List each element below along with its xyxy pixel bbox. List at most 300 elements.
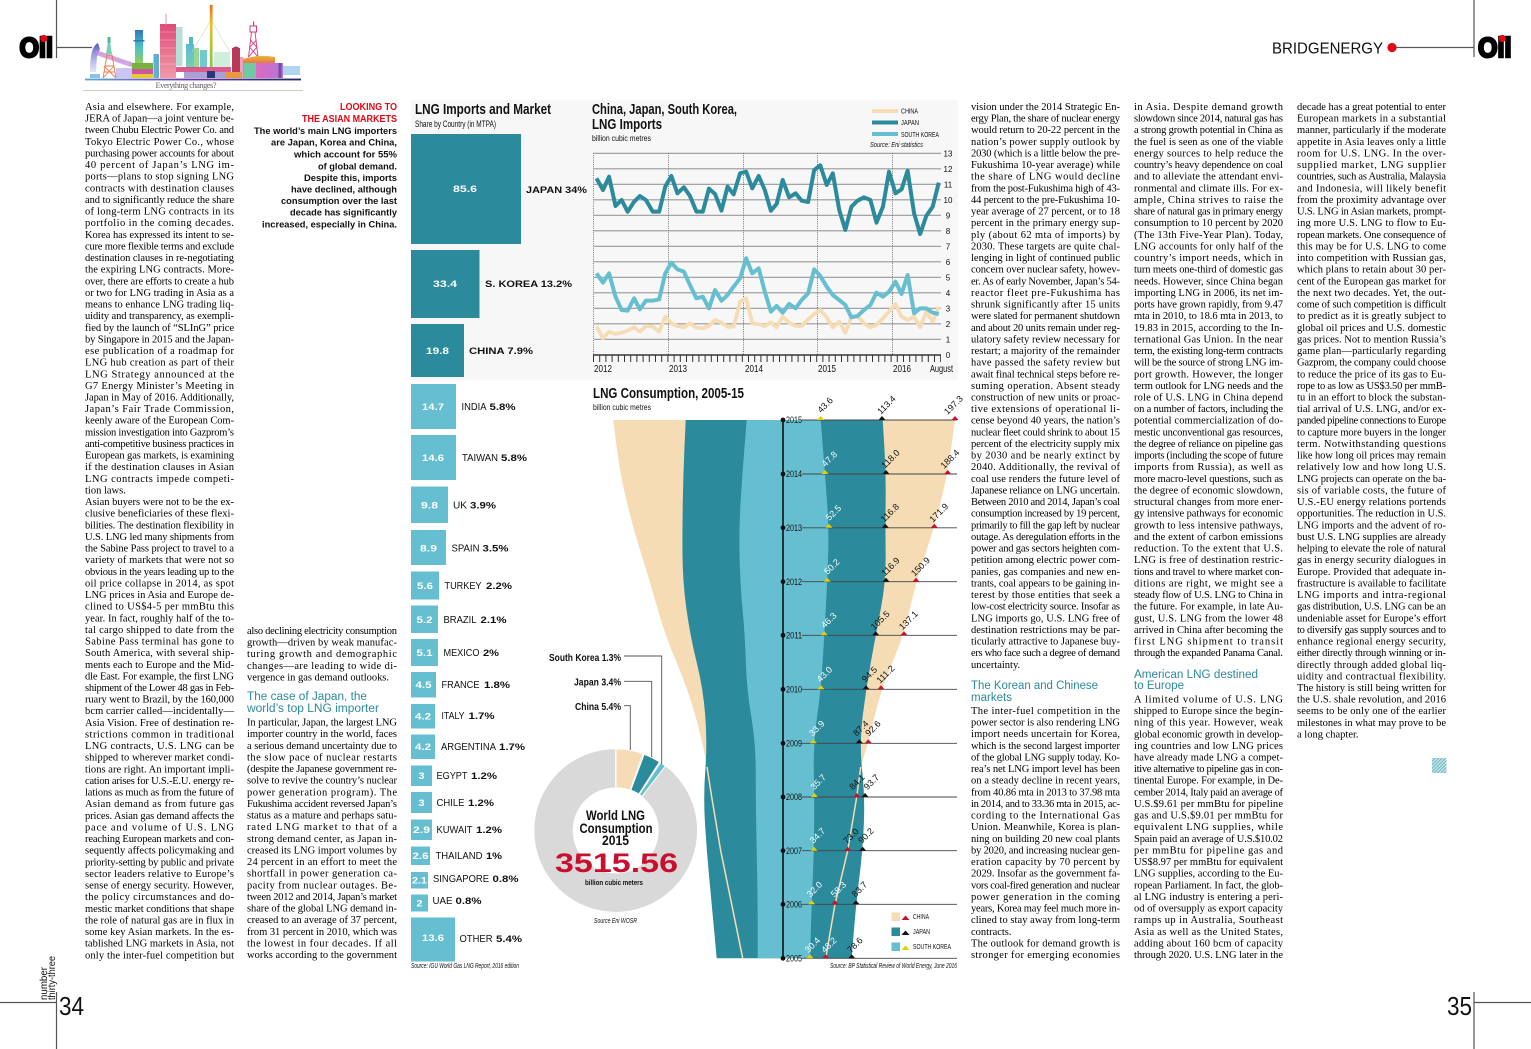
- column 3 body text, bottom: in 2014, and to 33.36 mta in 2015, ac-: [971, 799, 1120, 810]
- bar: India: 5.8%: [490, 402, 516, 413]
- bar: France: 4.5: [416, 680, 432, 691]
- bar: Other: 5.4%: [496, 934, 523, 945]
- column 4 body text, top: first LNG shipment to transit: [1134, 637, 1283, 648]
- column 4 body text, top: consumption to 10 percent by 2020: [1134, 218, 1283, 229]
- column 1 body text: ruary went to Brazil, by the 160,000: [85, 695, 234, 706]
- column 1 body text: tions are right. An important impli-: [85, 764, 234, 775]
- column 4 body text, top: imports from Russia), as well as: [1134, 462, 1283, 473]
- markers 2010: 43.0: [815, 665, 834, 684]
- right folio: page 35: [1447, 991, 1531, 1049]
- callout: looking to the Asian markets: The world’s main LNG importers: [254, 126, 397, 137]
- column 5 body text: LNG projects can operate on the ba-: [1297, 474, 1446, 485]
- column 5 body text: which plans to retain about 30 per-: [1297, 265, 1446, 276]
- subheading: American LNG destined to Europe: American LNG destined: [1134, 669, 1258, 681]
- year axis labels: 2015: [786, 415, 802, 425]
- column 4 body text, top: LNG is free of destination restric-: [1134, 555, 1284, 566]
- bar: UK: UK: [453, 500, 467, 512]
- year axis labels: [781, 415, 802, 964]
- bar: Singapore: 0.8%: [492, 874, 519, 885]
- column 1 body text: and to significantly reduce the share: [85, 195, 234, 206]
- y axis labels: 10: [944, 196, 953, 205]
- column 1 body text: South America, with several ship-: [85, 648, 234, 659]
- column 1 body text: LNG prices in Asia and Europe de-: [85, 590, 234, 601]
- series: China: [597, 298, 939, 338]
- column 3 body text, bottom: from 40.86 mta in 2013 to 37.98 mta: [971, 787, 1120, 798]
- left page masthead logo: Oil: [20, 32, 53, 63]
- column 5 body text: global oil prices and U.S. domestic: [1297, 323, 1446, 334]
- column 4 body text, bottom: ing countries and low LNG prices: [1134, 741, 1283, 752]
- year axis labels: 2010: [786, 684, 802, 694]
- column 3 body text, top: percent in the primary energy sup-: [971, 218, 1120, 229]
- column 1 body text: shipment of the Lower 48 gas in Feb-: [85, 683, 234, 694]
- column 3 body text, bottom: vors coal-fired generation and nuclear: [971, 880, 1120, 891]
- y axis labels: 6: [946, 258, 951, 267]
- column 4 body text, bottom: ramps up in Australia, Southeast: [1134, 915, 1283, 926]
- markers 2012: 116.9: [879, 555, 902, 578]
- donut chart: world LNG consumption: billion cubic meters: [585, 878, 643, 887]
- column 1 body text: clined to US$4-5 per mmBtu this: [85, 602, 234, 613]
- markers 2009: [807, 719, 883, 743]
- column 3 body text, top: from the post-Fukushima high of 43-: [971, 183, 1120, 194]
- column 1 body text: dle East. For example, the first LNG: [85, 671, 234, 682]
- column 3 body text, bottom: The inter-fuel competition in the: [971, 706, 1120, 717]
- column 3 body text, top: consumption increased by 19 percent,: [971, 509, 1120, 520]
- column 4 body text, bottom: ning of this year. However, weak: [1134, 718, 1284, 729]
- column 5 body text: decade has a great potential to enter: [1297, 102, 1446, 113]
- subheading: the Korean and Chinese markets: [971, 680, 1098, 704]
- bar: Singapore: 2.1: [412, 876, 428, 886]
- column 2 body text, bottom: solve to revive the country’s nuclear: [247, 776, 398, 787]
- column 4 body text, top: ronmental and climate ills. For ex-: [1134, 183, 1284, 194]
- leader labels: [549, 653, 621, 713]
- column 3 body text, top: nation’s power supply outlook by: [971, 137, 1121, 148]
- column 4 body text, bottom: Spain paid an average of U.S.$10.02: [1134, 834, 1283, 845]
- column 5 body text: frastructure is available to facilitate: [1297, 578, 1446, 589]
- column 4 body text, top: country’s heavy dependence on coal: [1134, 160, 1283, 171]
- column 5 body text: LNG imports and the advent of ro-: [1297, 520, 1446, 531]
- column 3 body text, top: coal use renders the future level of: [971, 474, 1120, 485]
- bar: Italy: ITALY: [442, 711, 465, 722]
- column 3 body text, bottom: which is the second largest importer: [971, 741, 1120, 752]
- column 3 body text, bottom: Union. Meanwhile, Korea is plan-: [971, 822, 1120, 833]
- y axis labels: 13: [944, 149, 953, 158]
- line chart legend: JAPAN: [901, 118, 919, 127]
- column 4 body text, top: (The 13th Five-Year Plan). Today,: [1134, 230, 1283, 241]
- column 2 body text, top: growth—driven by weak manufac-: [247, 638, 398, 649]
- column 1 body text: sequently affects policymaking and: [85, 846, 235, 857]
- column 1 body text: clusive beneficiaries of these flexi-: [85, 509, 234, 520]
- markers 2007: 90.2: [856, 826, 876, 845]
- column 5 body text: gas distribution, U.S. LNG can be an: [1297, 602, 1447, 613]
- column 5 body text: ing more U.S. LNG to flow to Eu-: [1297, 218, 1446, 229]
- markers 2014: [820, 447, 962, 474]
- column 1 body text: uidity and transparency, as exempli-: [85, 311, 234, 322]
- column 5 body text: either directly through winning or in-: [1297, 648, 1446, 659]
- line chart legend: [870, 106, 939, 149]
- heading: LNG consumption: billion cubic metres: [593, 402, 651, 412]
- column 1 body text: prices. Asian gas demand affects the: [85, 811, 234, 822]
- bar: Kuwait: 1.2%: [476, 825, 503, 836]
- bar: Taiwan: 14.6: [422, 453, 444, 464]
- column 4 body text, top: gy intensive pathways for economic: [1134, 509, 1283, 520]
- callout: looking to the Asian markets: [254, 102, 398, 230]
- column 4 body text, top: needs. However, since China began: [1134, 276, 1284, 287]
- callout: looking to the Asian markets: are Japan, Korea and China,: [271, 138, 397, 148]
- bar: UAE: 2: [416, 898, 422, 910]
- stream chart legend: JAPAN: [913, 927, 930, 936]
- markers 2014: 47.8: [820, 449, 839, 469]
- column 4 body text, bottom: tinental Europe. For example, in De-: [1134, 776, 1284, 787]
- column 1 body text: strictions common in traditional: [85, 729, 234, 740]
- column 3 body text, top: construction of new units or proac-: [971, 392, 1120, 403]
- bar: Other: 13.6: [422, 933, 444, 944]
- column 3 body text, top: Japanese reliance on LNG uncertain.: [971, 485, 1120, 496]
- column 1 body text: mestic market conditions that shape: [85, 904, 234, 915]
- column 5 body text: and Indonesia, will likely benefit: [1297, 183, 1446, 194]
- leader lines: [624, 656, 662, 764]
- column 4 body text, top: tions and travel to where market con-: [1134, 567, 1284, 578]
- bar: Mexico: MEXICO: [444, 648, 480, 659]
- bar: South Korea: 33.4: [433, 279, 458, 290]
- column 1 body text: European gas markets, is examining: [85, 451, 235, 462]
- column 2 body text, bottom: power generation program). The: [247, 787, 397, 798]
- column 1 body text: Asia Vision. Free of destination re-: [85, 718, 234, 729]
- slice: Japan: [631, 754, 660, 794]
- column 1 body text: contracts with destination clauses: [85, 183, 234, 194]
- bar: Chile: 1.2%: [468, 798, 495, 809]
- column 3 body text, top: ticularly attractive to Japanese buy-: [971, 637, 1120, 648]
- callout: looking to the Asian markets: which account for 55%: [293, 150, 398, 160]
- markers 2010: [815, 663, 897, 689]
- markers 2006: 83.7: [850, 880, 869, 899]
- year axis labels: 2013: [786, 523, 802, 533]
- column 3 body text, bottom: eration capacity by 70 percent by: [971, 857, 1121, 868]
- column 5 body text: Europe. Provided that adequate in-: [1297, 567, 1446, 578]
- markers 2008: [809, 772, 881, 797]
- column 3 body text, top: shrunk significantly after 15 units: [971, 300, 1120, 311]
- bar: Thailand: [411, 846, 503, 865]
- bar: Turkey: TURKEY: [444, 581, 482, 592]
- donut centre text: Consumption: [580, 820, 652, 836]
- y axis labels: 0: [946, 351, 951, 360]
- markers 2011: 46.3: [819, 611, 839, 630]
- column 4 body text, top: potential commercialization of do-: [1134, 416, 1284, 427]
- column 5 body text: into competition with Russian gas,: [1297, 253, 1446, 264]
- column 1 body text: some key Asian markets. In the es-: [85, 927, 234, 938]
- column 5 body text: Gazprom, the company could choose: [1297, 358, 1446, 369]
- column 4 body text, top: structural changes from more ener-: [1134, 497, 1284, 508]
- column 3 body text, top: power and gas sectors heighten com-: [971, 544, 1120, 555]
- column 4 body text, bottom: LNG supplies, according to the Eu-: [1134, 869, 1284, 880]
- column 1 body text: Japan’s Fair Trade Commission,: [85, 404, 234, 415]
- heading: China, Japan, South Korea imports: China, Japan, South Korea,: [592, 102, 737, 118]
- column 3 body text, top: cense beyond 40 years, the nation’s: [971, 416, 1120, 427]
- column 5 body text: the next two decades. Yet, the out-: [1297, 288, 1446, 299]
- subheading: American LNG destined to Europe: to Europe: [1134, 680, 1184, 692]
- bar: Taiwan: [411, 435, 528, 480]
- column 3 body text, top: suming operation. Absent steady: [971, 381, 1121, 392]
- column 4 body text, bottom: equivalent LNG supplies, while: [1134, 822, 1283, 833]
- column 1 body text: shipped to wherever market condi-: [85, 753, 234, 764]
- column 1 body text: Japan in May of 2016. Additionally,: [85, 392, 234, 403]
- column 1 body text: sector leaders relative to Europe’s: [85, 869, 234, 880]
- heading: LNG imports and market: [415, 102, 551, 129]
- column 2 body text, bottom: rated LNG market to that of a: [247, 822, 397, 833]
- bar: China: [411, 324, 534, 377]
- column 3 body text, top: vision under the 2014 Strategic En-: [971, 102, 1120, 113]
- bar: Spain: 3.5%: [482, 544, 509, 554]
- column 1 body text: tween Chubu Electric Power Co. and: [85, 125, 235, 136]
- column 5 body text: to reduce the price of its gas to Eu-: [1297, 369, 1446, 380]
- column 1 body text: only the inter-fuel competition but: [85, 950, 234, 961]
- bar: Egypt: 3: [418, 771, 424, 782]
- bar: Brazil: 2.1%: [480, 615, 507, 626]
- column 2 body text, bottom: status as a mature and perhaps satu-: [247, 811, 398, 822]
- column 4 body text, top: on a number of factors, including the: [1134, 404, 1283, 415]
- column 1 body text: portfolio in the coming decades.: [85, 218, 234, 229]
- markers 2009: 33.9: [807, 719, 827, 738]
- markers 2011: 137.1: [897, 609, 920, 632]
- column 3 body text, top: await final technical steps before re-: [971, 369, 1120, 380]
- column 4 body text, top: turn meets one-third of domestic gas: [1134, 265, 1283, 276]
- bar: Kuwait: 2.9: [413, 825, 430, 836]
- column 4 body text, bottom: have already made LNG a compet-: [1134, 752, 1284, 764]
- right page section name and logo: Oil: [1478, 32, 1512, 63]
- column 4 body text, top: steady flow of U.S. LNG to China in: [1134, 590, 1284, 601]
- donut chart: world LNG consumption: 3515.56: [555, 848, 678, 878]
- bar: Italy: 1.7%: [468, 711, 495, 722]
- markers 2014: 188.4: [938, 447, 962, 471]
- subheading: the Korean and Chinese markets: markets: [971, 692, 1012, 704]
- callout: looking to the Asian markets: Despite this, imports: [304, 173, 397, 184]
- left page masthead logo: [20, 0, 92, 63]
- column 4 body text, bottom: shipped to Europe since the begin-: [1134, 706, 1284, 717]
- column 3 body text, bottom: of the global LNG supply today. Ko-: [971, 752, 1120, 763]
- column 3 body text, top: were slated for permanent shutdown: [971, 311, 1121, 322]
- column 1 body text: the policy circumstances and do-: [85, 892, 234, 903]
- column 3 body text, top: have passed the safety review but: [971, 358, 1120, 369]
- bar: Spain: 8.9: [420, 544, 437, 554]
- column 2 body text, bottom: a serious demand uncertainty due to: [247, 741, 397, 752]
- column 3 body text, top: reactor fleet pre-Fukushima has: [971, 288, 1120, 299]
- column 5 body text: rope to as low as US$3.50 per mmB-: [1297, 381, 1446, 392]
- markers 2014: 118.0: [879, 448, 902, 470]
- column 4 body text, top: term outlook for LNG needs and the: [1134, 381, 1283, 392]
- column 2 body text, bottom: (despite the Japanese government re-: [247, 764, 398, 775]
- column 1 body text: of long-term LNG contracts in its: [85, 207, 234, 218]
- column 4 body text, top: a strong growth potential in China as: [1134, 125, 1283, 136]
- column 1 body text: ese publication of a roadmap for: [85, 346, 234, 357]
- column 4 body text, top: ternational Gas Union. In the near: [1134, 334, 1284, 345]
- column 2 body text, bottom: importer country in the world, faces: [247, 729, 397, 740]
- leader labels: South Korea 1.3%: [549, 653, 621, 664]
- column 3 body text, top: ers who face such a degree of demand: [971, 648, 1121, 659]
- bar: UK: [411, 486, 497, 523]
- bar: Singapore: SINGAPORE: [433, 874, 489, 885]
- column 5 body text: game plan—particularly regarding: [1297, 346, 1447, 357]
- markers 2010: 111.2: [874, 663, 897, 685]
- column 5 body text: European markets in a substantial: [1297, 114, 1446, 125]
- column 1 body text: variety of markets that were not so: [85, 555, 234, 566]
- column 5 body text: like how long oil prices may remain: [1297, 451, 1447, 462]
- column 5 body text: sis of variable costs, the future of: [1297, 485, 1446, 496]
- column 4 body text, top: port growth. However, the longer: [1134, 369, 1284, 380]
- column 5 body text: room for U.S. LNG. In the over-: [1297, 148, 1446, 159]
- column 1 body text: cation arises for U.S.-E.U. energy re-: [85, 776, 234, 787]
- markers 2008: 93.7: [862, 772, 881, 792]
- y axis labels: 12: [944, 165, 953, 174]
- markers 2009: 92.6: [863, 719, 883, 738]
- column 3 body text, top: tive extensions of operational li-: [971, 404, 1120, 415]
- line chart legend: CHINA: [901, 106, 918, 116]
- column 5 body text: a long chapter.: [1297, 729, 1359, 740]
- column 1 body text: or two for LNG trading in Asia as a: [85, 288, 234, 299]
- bar: China: 19.8: [426, 346, 449, 357]
- thin China line within Japan band: [707, 767, 861, 958]
- column 1 body text: means to enhance LNG trading liq-: [85, 300, 234, 311]
- y axis labels: [944, 149, 953, 360]
- column 5 body text: term. Notwithstanding questions: [1297, 439, 1446, 450]
- column 2 body text, bottom: the slow pace of nuclear restarts: [247, 752, 397, 763]
- bar: Egypt: 1.2%: [471, 771, 498, 782]
- column 3 body text, top: would return to 20-22 percent in the: [971, 125, 1120, 136]
- column 5 body text: relatively low and how long U.S.: [1297, 462, 1446, 473]
- column 3 body text, top: percent of the electricity supply mix: [971, 439, 1121, 450]
- line chart legend: Source: Eni statistics: [870, 142, 923, 149]
- right page section name and logo: [1272, 0, 1512, 63]
- column 2 body text, bottom: Fukushima accident reversed Japan’s: [247, 799, 397, 810]
- series: South Korea: [597, 258, 939, 317]
- column 1 body text: LNG contracts, U.S. LNG can be: [85, 741, 234, 752]
- column 2 body text, bottom: In particular, Japan, the largest LNG: [247, 718, 397, 729]
- stream chart legend: CHINA: [913, 912, 929, 921]
- x axis labels: 2012: [594, 363, 612, 375]
- year axis labels: 2012: [786, 577, 802, 587]
- markers 2012: 50.2: [822, 557, 842, 576]
- column 4 body text, top: ports have grown rapidly, from 9.47: [1134, 300, 1283, 311]
- bar: Japan: 85.6: [453, 184, 477, 195]
- bar: France: [411, 672, 511, 698]
- column 1 body text: destination clauses in re-negotiating: [85, 253, 235, 264]
- column 3 body text, top: ulatory safety review necessary for: [971, 334, 1120, 345]
- bar: Taiwan: 5.8%: [501, 453, 528, 464]
- column 4 body text, top: ditions are right, we might see a: [1134, 578, 1283, 589]
- bar: Argentina: ARGENTINA: [441, 742, 496, 753]
- subheading: the case of Japan: [246, 691, 379, 715]
- bar: Turkey: [411, 572, 513, 600]
- column 4 body text, top: ample, China strives to raise the: [1134, 195, 1283, 206]
- column 1 body text: by Singapore in 2015 and the Japan-: [85, 334, 234, 345]
- markers 2012: 150.9: [909, 555, 932, 578]
- column 5 body text: LNG imports and intra-regional: [1297, 590, 1446, 601]
- column 2 body text, bottom: 24 percent in an effort to meet the: [247, 857, 397, 868]
- column 5 body text: tu in an effort to block the substan-: [1297, 392, 1446, 403]
- column 1 body text: ports—plans to stop signing LNG: [85, 172, 234, 183]
- column 5 body text: seems to be only one of the earlier: [1297, 706, 1446, 717]
- column 4 body text, bottom: Asia as well as the United States,: [1134, 927, 1283, 938]
- column 1 body text: tion laws.: [85, 485, 126, 496]
- bar: Chile: CHILE: [436, 798, 465, 809]
- column 4 body text, top: share of natural gas in primary energy: [1134, 207, 1284, 218]
- column 4 body text, bottom: gas and U.S.$9.01 per mmBtu for: [1134, 811, 1284, 822]
- markers 2007: [808, 826, 876, 851]
- leader labels: China 5.4%: [575, 702, 621, 713]
- column 3 body text, top: lenging in light of continued public: [971, 253, 1120, 264]
- bar: Taiwan: TAIWAN: [462, 453, 498, 464]
- markers 2010: 94.5: [860, 665, 879, 684]
- bar: Mexico: 5.1: [416, 648, 433, 659]
- column 1 body text: if the destination clauses in Asian: [85, 462, 235, 473]
- column 1 body text: JERA of Japan—a joint venture be-: [85, 114, 234, 125]
- column 4 body text, bottom: U.S.$9.61 per mmBtu for pipeline: [1134, 799, 1283, 810]
- bar: Brazil: 5.2: [416, 615, 432, 626]
- bar: Argentina: 4.2: [415, 742, 431, 753]
- markers 2015: 197.3: [942, 393, 965, 417]
- subheading: the Korean and Chinese markets: The Korean and Chinese: [971, 680, 1098, 692]
- markers 2015: 113.4: [875, 394, 898, 416]
- column 1 body text: LNG contracts impede competi-: [85, 474, 234, 485]
- column 3 body text, top: destination restrictions may be par-: [971, 625, 1120, 636]
- year axis labels: 2009: [786, 738, 802, 748]
- column 3 body text, bottom: 2029. Insofar as the government fa-: [971, 869, 1120, 880]
- column 3 body text, bottom: clined to stay away from long-term: [971, 915, 1120, 926]
- column 5 body text: bust U.S. LNG supplies are already: [1297, 532, 1447, 543]
- markers 2005: 48.2: [819, 935, 839, 955]
- column 1 body text: ments each to Europe and the Mid-: [85, 660, 234, 671]
- column 1 body text: keenly aware of the European Com-: [85, 416, 234, 427]
- column 5 body text: U.S. LNG in Asian markets, prompt-: [1297, 207, 1446, 218]
- callout: looking to the Asian markets: LOOKING TO: [340, 102, 397, 113]
- bar: Other: OTHER: [460, 934, 492, 945]
- column 4 body text, top: imports (including the scope of future: [1134, 451, 1283, 462]
- column 4 body text, top: mta in 2010, to 18.6 mta in 2013, to: [1134, 311, 1283, 322]
- year axis labels: 2008: [786, 792, 802, 802]
- bar: France: FRANCE: [442, 680, 480, 691]
- markers 2005: [803, 935, 865, 958]
- source: stream chart: Source: BP Statistical Review of World Energy, June 2016: [830, 963, 957, 970]
- column 1 body text: tablished LNG markets in Asia, not: [85, 939, 234, 950]
- bar: Mexico: [411, 639, 500, 666]
- column 1 body text: U.S. LNG led many shipments from: [85, 532, 234, 543]
- column 1 body text: oil price collapse in 2014, as spot: [85, 578, 234, 589]
- right page section name and logo: BRIDGENERGY: [1272, 40, 1383, 58]
- y axis labels: 9: [946, 211, 951, 220]
- column 5 body text: gas prices. Not to mention Russia’s: [1297, 334, 1446, 345]
- bar: UAE: UAE: [432, 896, 453, 907]
- column 2 body text, bottom: tween 2012 and 2014, Japan’s market: [247, 892, 397, 903]
- bar: Thailand: THAILAND: [436, 851, 482, 862]
- column 4 body text, bottom: global economic growth in develop-: [1134, 729, 1284, 740]
- subheading: American LNG destined to Europe: [1134, 669, 1258, 692]
- column 4 body text, top: the degree of economic slowdown,: [1134, 485, 1283, 496]
- column 4 body text, top: the fuel is seen as one of the viable: [1134, 137, 1283, 148]
- donut chart: world LNG consumption: [549, 653, 678, 893]
- bar: Brazil: [411, 606, 507, 633]
- markers 2008: 35.7: [809, 772, 828, 792]
- column 5 body text: milestones in what may prove to be: [1297, 718, 1446, 729]
- year axis labels: 2006: [786, 900, 802, 910]
- leader labels: Japan 3.4%: [574, 678, 621, 688]
- column 1 body text: cure more flexible terms and exclude: [85, 241, 234, 252]
- left folio: number thirty-three, page 34: number: [38, 967, 50, 1000]
- bar: Chile: 3: [418, 798, 424, 809]
- column 3 body text, top: ergy Plan, the share of nuclear energy: [971, 114, 1121, 125]
- column 4 body text, top: will be the source of strong LNG im-: [1134, 358, 1284, 369]
- callout: looking to the Asian markets: increased, especially in China.: [262, 220, 397, 230]
- bar: South Korea: [411, 250, 573, 318]
- column 2 body text, top: changes—are leading to wide di-: [247, 661, 398, 672]
- bar: UK: 9.8: [421, 500, 438, 512]
